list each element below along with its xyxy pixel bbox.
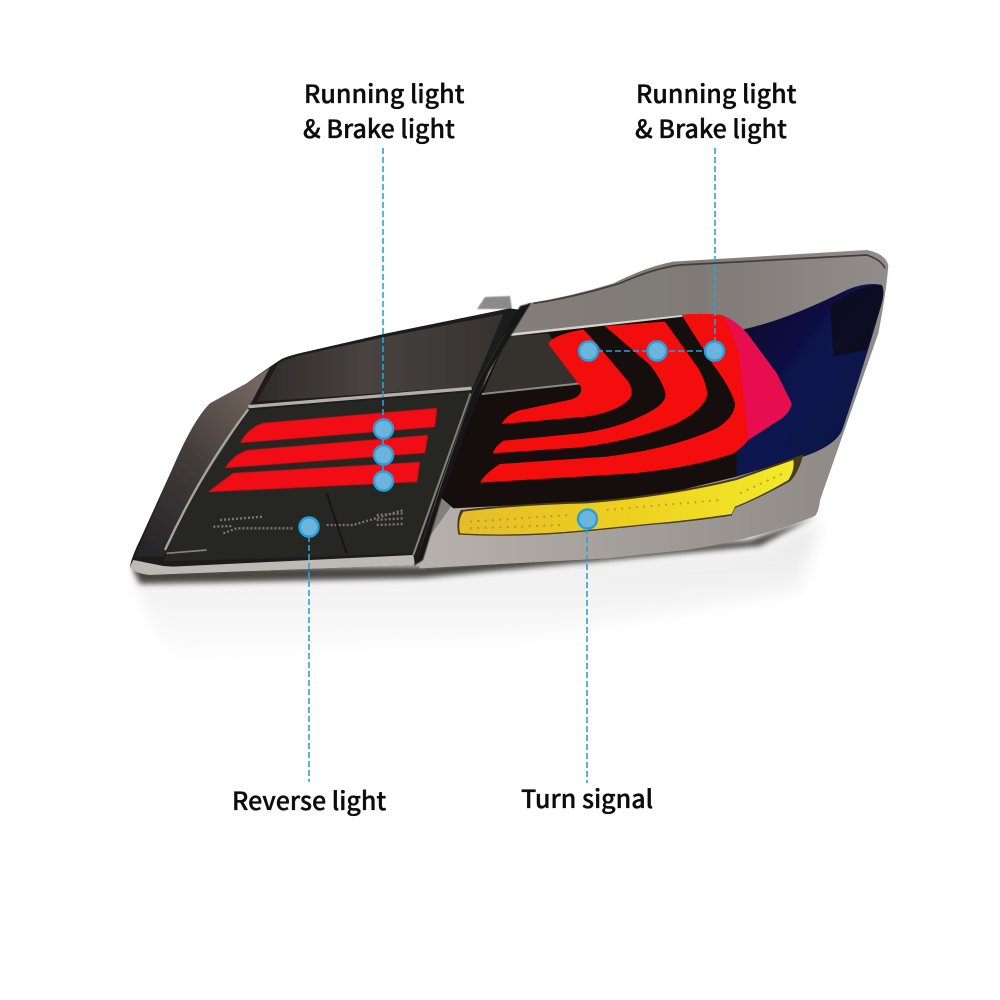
left lamp outer shell: [130, 308, 522, 575]
silver line above lens: [507, 316, 683, 335]
running light chevron 2: [493, 322, 707, 453]
dark seam between the two lamps: [414, 303, 531, 566]
silver strip: [248, 388, 472, 407]
upper trim line: [533, 255, 885, 303]
right red chevrons: [480, 314, 792, 483]
side housing: [135, 367, 270, 557]
tail light assembly: [130, 250, 888, 575]
right edge trim: [413, 393, 471, 555]
running light chevron 3: [480, 314, 748, 483]
left red bars: [208, 408, 437, 492]
yellow turn signal: [457, 454, 803, 536]
reverse light LED speckle: [213, 510, 403, 533]
lower black lens: [163, 392, 470, 562]
callout marker dots: [300, 342, 724, 536]
floor reflection: [132, 516, 820, 668]
label: left running and brake light: & Brake light: [303, 110, 455, 146]
label: right running and brake light: Running light: [636, 75, 797, 111]
black wedge of the navy panel: [830, 285, 883, 357]
label: reverse light: Reverse light: [232, 782, 386, 818]
inner silver line: [482, 383, 580, 394]
left lamp (trunk section): [130, 308, 522, 575]
pink lens section: [722, 315, 792, 440]
label: left running and brake light: Running light: [304, 75, 465, 111]
mounting tab: [477, 296, 512, 309]
label: turn signal: Turn signal: [521, 780, 653, 816]
upper smoked lens: [257, 314, 503, 402]
right lamp outer shell: [418, 250, 888, 568]
running light chevron 1: [502, 329, 632, 424]
upper-left smoked corner: [483, 333, 581, 393]
label: right running and brake light: & Brake light: [635, 110, 787, 146]
silver side trim: [165, 409, 248, 550]
black lens: [440, 317, 792, 508]
lower silver body: [418, 433, 842, 568]
right lamp: [418, 250, 888, 568]
navy reflection panel: [737, 284, 883, 477]
callout leader lines: [309, 148, 715, 783]
bottom silver trim: [130, 555, 415, 575]
